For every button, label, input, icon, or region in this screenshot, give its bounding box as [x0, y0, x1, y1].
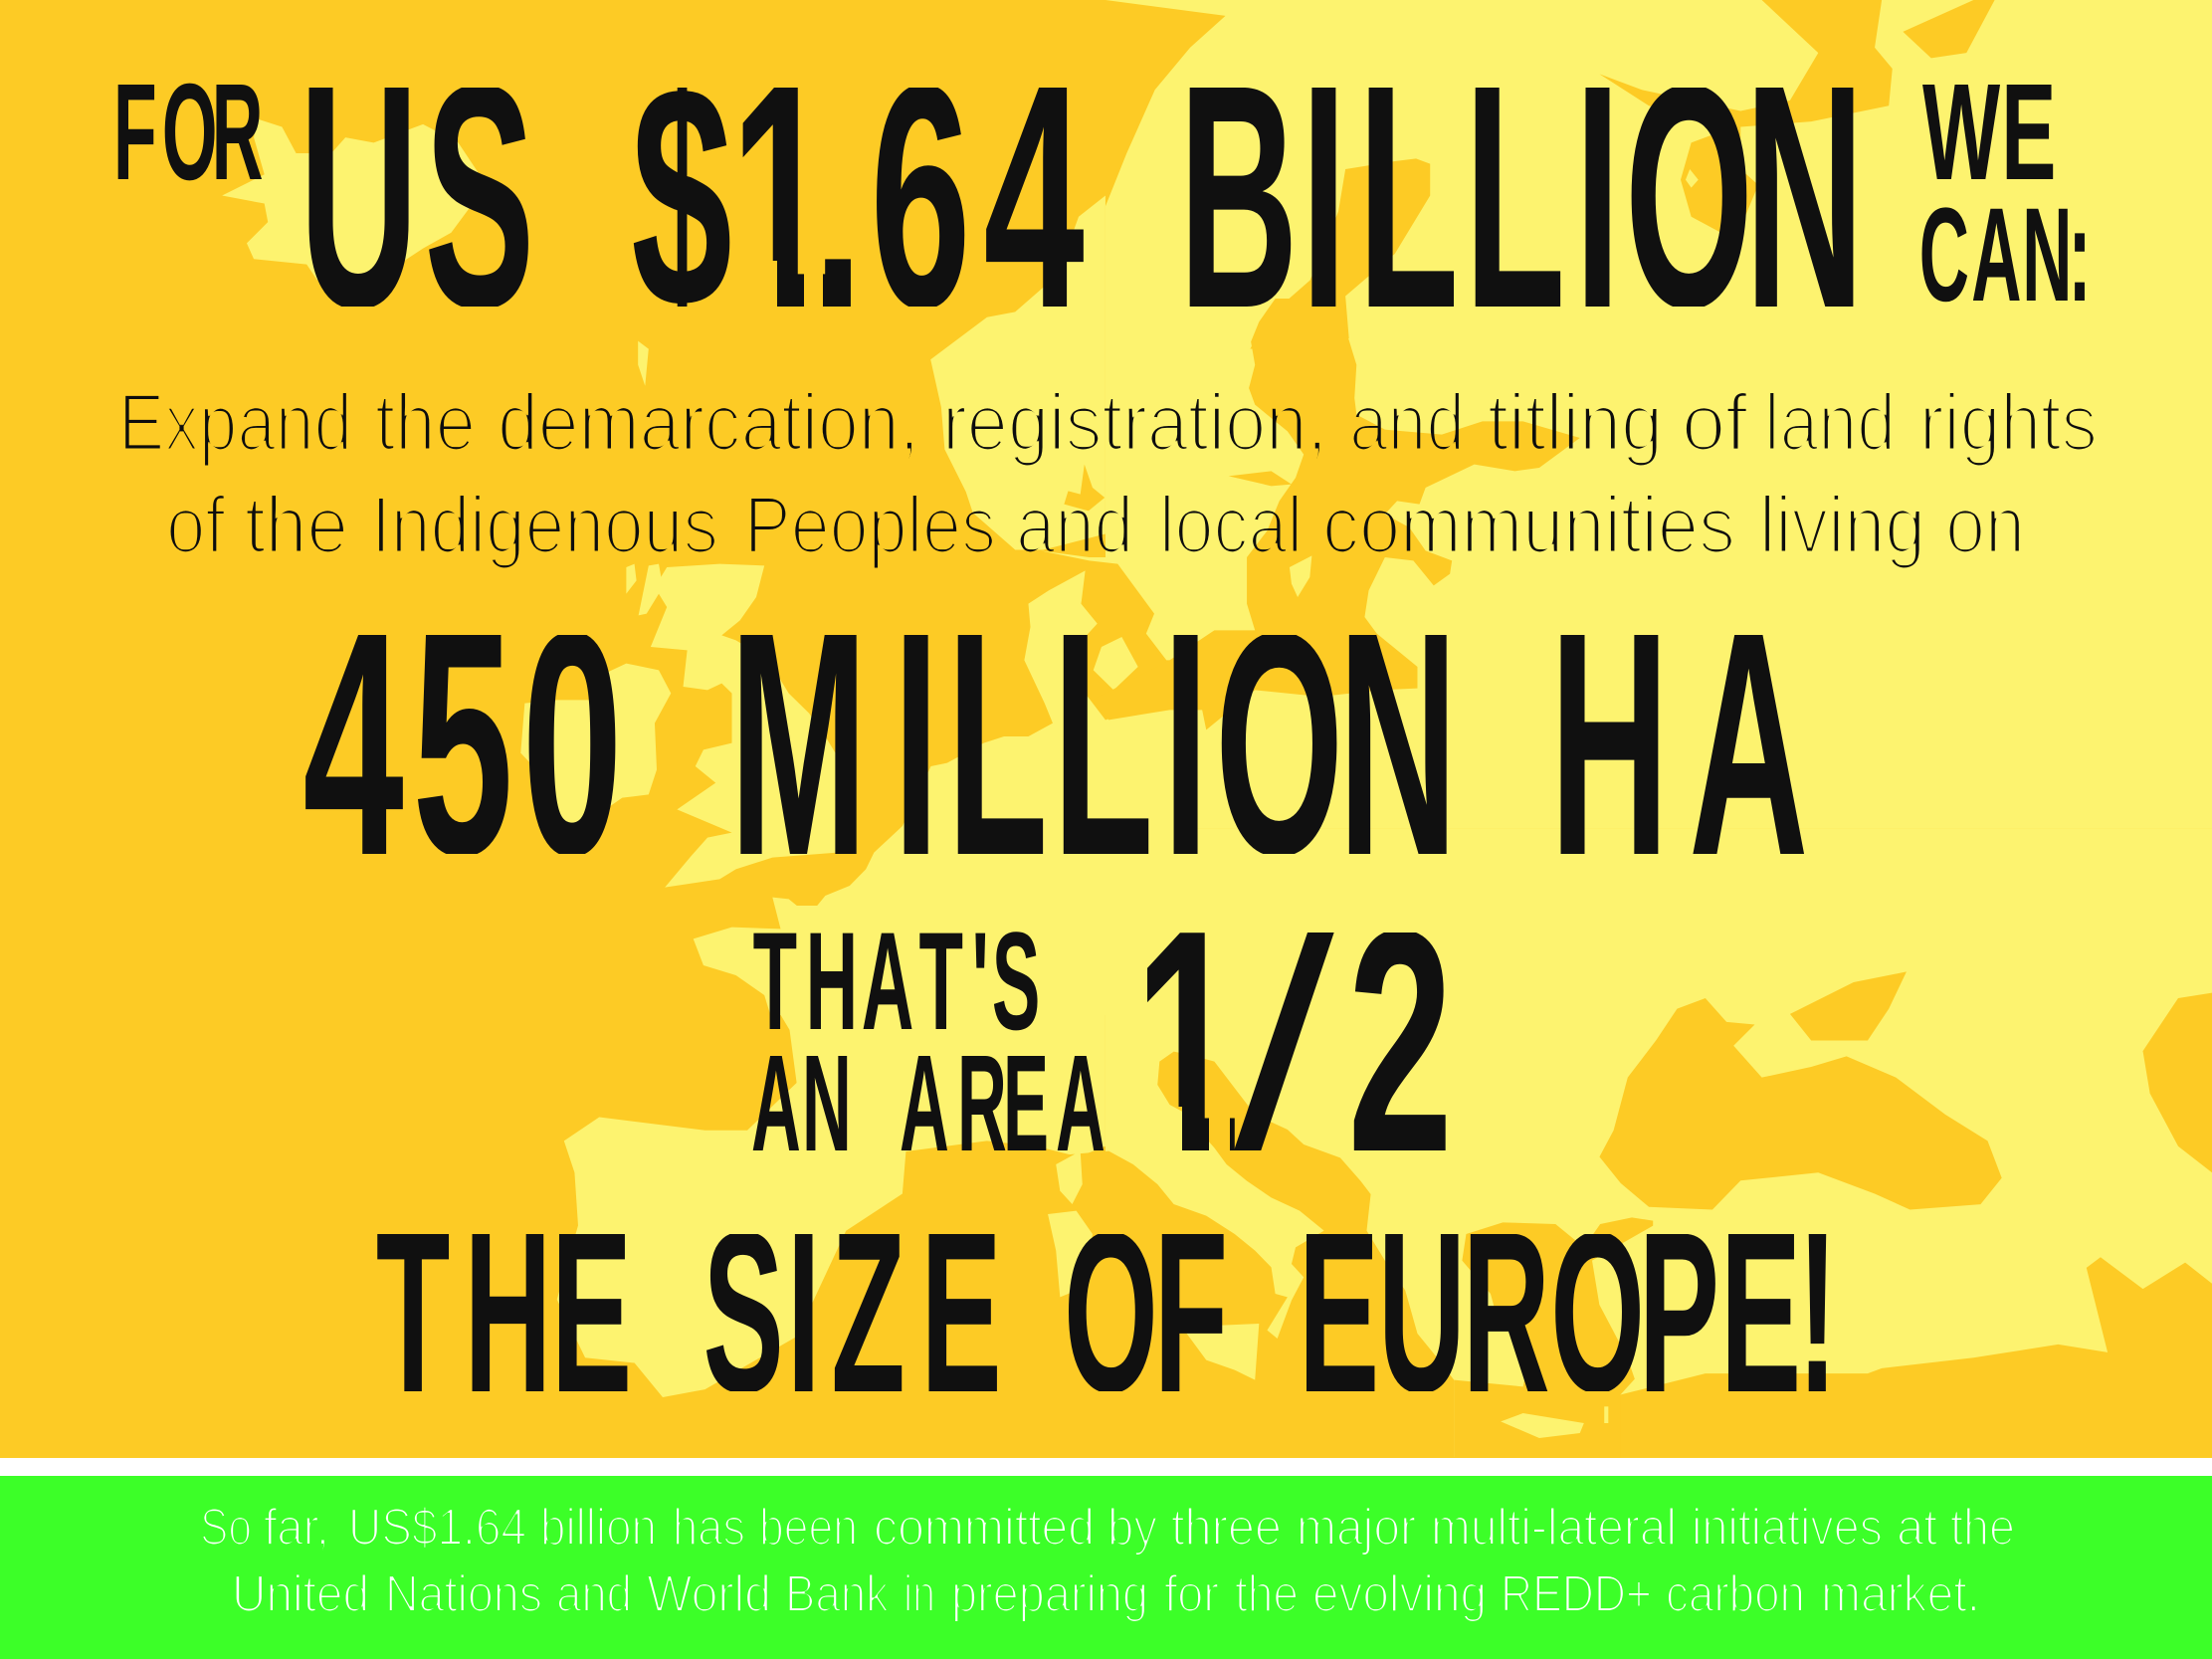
text block: footer line two: in — [904, 1565, 935, 1623]
heading: for US $1.64 billion we can — [117, 84, 2085, 307]
text block: footer line one: initiatives — [1692, 1499, 1883, 1556]
text: HA: HA — [1549, 566, 1808, 923]
text block: footer line two: the — [1235, 1565, 1299, 1623]
text block: footer line one: far, — [264, 1499, 329, 1556]
text block: footer line two: for — [1164, 1565, 1219, 1623]
text block: expand land rights line two: Peoples — [744, 481, 996, 570]
map: Iceland and Norway — [222, 119, 1106, 549]
text: FOR: FOR — [113, 56, 263, 209]
text block: expand land rights line one: demarcation, — [498, 378, 919, 468]
text block: expand land rights line two: the — [245, 481, 348, 570]
text: SIZE: SIZE — [703, 1185, 1002, 1441]
text block: footer line one: has — [673, 1499, 745, 1556]
text block: expand land rights line two: local — [1159, 481, 1303, 570]
text: OF: OF — [1064, 1185, 1228, 1441]
text block: footer line one: US$1.64 — [348, 1499, 526, 1556]
divider band — [0, 1458, 2212, 1476]
text block: footer line two: Nations — [385, 1565, 542, 1623]
text block: expand land rights line two — [166, 481, 2025, 570]
text block: footer line one: major — [1297, 1499, 1416, 1556]
map: Baltic Sea — [1064, 299, 1580, 729]
text block: footer line two: market. — [1821, 1565, 1980, 1623]
text block: footer line two: REDD+ — [1501, 1565, 1652, 1623]
text: AN: AN — [751, 1027, 852, 1180]
text block: expand land rights line one: titling — [1488, 378, 1663, 468]
text block: footer line one: So — [200, 1499, 252, 1556]
text block: expand land rights line one: Expand — [118, 378, 352, 468]
text block: footer line two — [232, 1565, 1980, 1623]
map: Scandinavia and north Russia — [1106, 0, 2212, 829]
text: EUROPE!: EUROPE! — [1299, 1185, 1838, 1441]
text: MILLION: MILLION — [729, 566, 1458, 923]
text block: expand land rights line two: Indigenous — [371, 481, 718, 570]
text block: footer line one: by — [1107, 1499, 1157, 1556]
text block: expand land rights line two: of — [166, 481, 225, 570]
text block: expand land rights line two: living — [1759, 481, 1925, 570]
text: 1/2: / — [1217, 865, 1352, 1218]
map: eastern Europe, Black Sea and Turkey — [1106, 829, 2212, 1457]
text: US: US — [300, 19, 534, 375]
text: $1.64: $1.64 — [631, 19, 1086, 375]
text: 450: 450 — [302, 566, 623, 923]
text block: expand land rights line two: and — [1016, 481, 1133, 570]
text block: expand land rights line one: rights — [1919, 378, 2098, 468]
text block: footer line two: evolving — [1312, 1565, 1487, 1623]
text block: expand land rights line one: registration, — [942, 378, 1327, 468]
heading: 450 million ha — [305, 635, 1804, 854]
text block: footer line one: been — [759, 1499, 858, 1556]
text: 1/2 — [1147, 933, 1446, 1150]
heading: the size of europe — [377, 1234, 1827, 1391]
text block: footer line two: preparing — [951, 1565, 1148, 1623]
text block: expand land rights line one: land — [1764, 378, 1896, 468]
text block: expand land rights line two: communities — [1322, 481, 1735, 570]
text block: footer line two: and — [556, 1565, 632, 1623]
text block: expand land rights line two: on — [1945, 481, 2025, 570]
text block: footer line one: multi-lateral — [1431, 1499, 1677, 1556]
text block: footer line one: the — [1950, 1499, 2015, 1556]
panel: green footer — [0, 1476, 2212, 1659]
map: Iberia and south-west France — [557, 987, 1106, 1397]
text: THE: THE — [376, 1185, 632, 1441]
text block: footer line one: three — [1171, 1499, 1282, 1556]
text block: footer line one: committed — [874, 1499, 1095, 1556]
text: 1/2: 2 — [1347, 865, 1453, 1218]
text block: footer line two: carbon — [1666, 1565, 1805, 1623]
text: BILLION: BILLION — [1179, 19, 1865, 375]
text: THAT'S: THAT'S — [753, 903, 1040, 1059]
text block: footer line one: billion — [540, 1499, 657, 1556]
map: British Isles, Denmark and continental coast — [520, 550, 1194, 1015]
text: CAN:: CAN: — [1919, 179, 2092, 329]
text block: expand land rights line one: and — [1349, 378, 1465, 468]
text: WE: WE — [1922, 56, 2056, 209]
text: big amount line — [308, 88, 1853, 307]
text block: footer line one: at — [1897, 1499, 1938, 1556]
text block: footer line two: World — [647, 1565, 771, 1623]
text block: expand land rights line one: the — [375, 378, 476, 468]
text block: footer line two: Bank — [785, 1565, 890, 1623]
map: Mediterranean Sea, Italy and Greece — [995, 1052, 1653, 1458]
text: AREA: AREA — [900, 1027, 1106, 1180]
text: 1/2: 1 — [1134, 865, 1240, 1218]
text block: expand land rights line one: of — [1682, 378, 1747, 468]
text block: footer line one — [200, 1499, 2015, 1556]
text block: expand land rights line one — [118, 378, 2098, 468]
callout: that's an area 1/2 — [752, 932, 1446, 1150]
text block: footer line two: United — [232, 1565, 369, 1623]
